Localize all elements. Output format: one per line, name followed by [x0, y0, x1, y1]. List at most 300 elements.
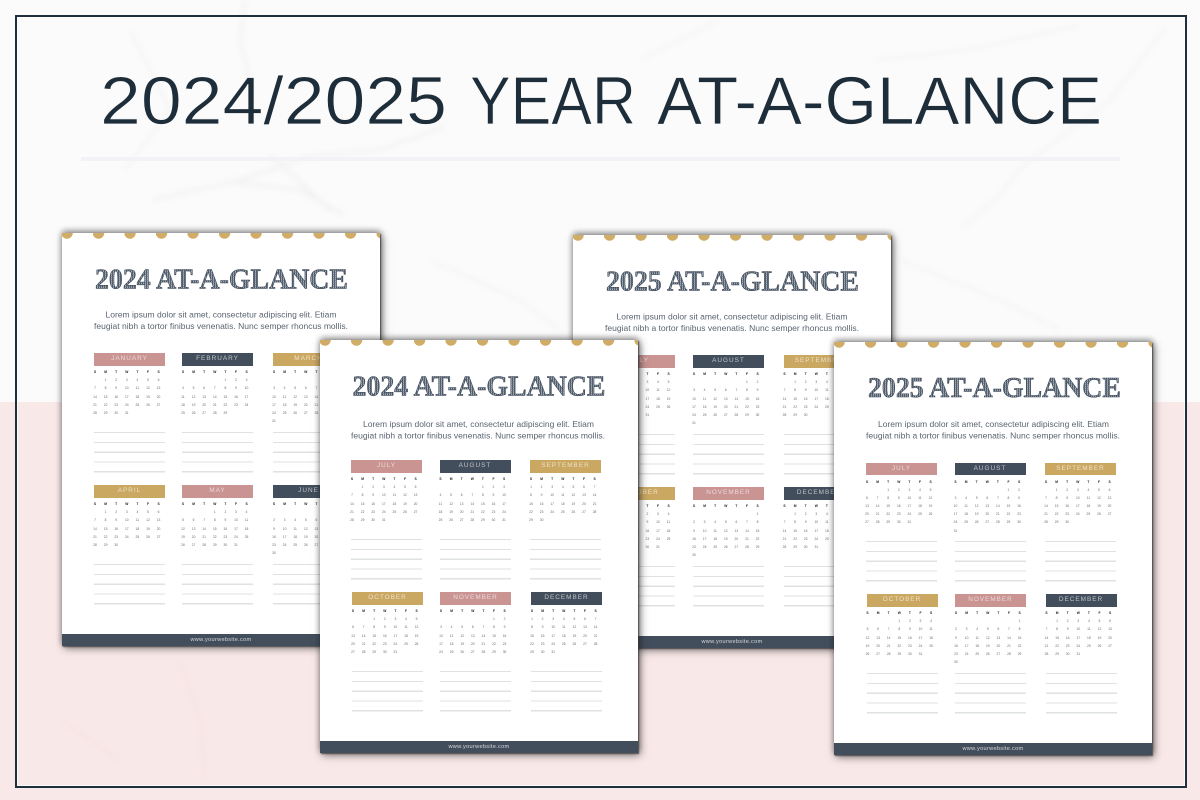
month: September: 10 [550, 493, 554, 497]
month: February: 20 [202, 403, 206, 407]
month: December: T [1067, 611, 1069, 615]
month: June: 29 [336, 543, 339, 547]
month: December: T [1088, 611, 1090, 615]
month: October: 14 [624, 529, 628, 533]
month: September: T [826, 372, 828, 376]
month: May: T [224, 502, 226, 506]
month: December: 15 [1055, 636, 1059, 640]
month: September: 13 [846, 388, 850, 392]
month: July [865, 463, 937, 582]
month: April: 1 [105, 510, 107, 514]
month: August: 25 [964, 520, 968, 524]
month: October: 10 [656, 520, 660, 524]
month: August: T [461, 477, 463, 481]
month: September [529, 460, 601, 580]
month: December: 1 [794, 512, 796, 516]
month: January: 8 [105, 386, 107, 390]
month: July: 25 [656, 405, 660, 409]
month: February: 27 [202, 411, 206, 415]
month: January: 10 [125, 386, 129, 390]
month: September: 6 [583, 485, 585, 489]
month: July: M [876, 480, 879, 484]
month: August: 11 [703, 397, 706, 401]
month: August: 20 [724, 405, 728, 409]
month: September: 12 [1097, 496, 1101, 500]
month: October: 29 [897, 652, 901, 656]
month: July: S [866, 480, 868, 484]
month: September: 21 [593, 502, 596, 506]
month: November: NOVEMBER [706, 489, 751, 496]
month: September: 12 [572, 493, 575, 497]
month: July: 21 [350, 510, 354, 514]
month: September: 11 [825, 388, 829, 392]
month: November: 28 [1007, 652, 1011, 656]
month: March: 27 [304, 411, 308, 415]
month: September: 22 [529, 510, 533, 514]
month: May: 21 [202, 535, 206, 539]
month: September: 20 [582, 502, 586, 506]
month: October: 31 [919, 652, 922, 656]
month: October: 25 [404, 642, 408, 646]
month: March: S [273, 370, 275, 374]
month: November: 30 [503, 650, 506, 654]
month: April: T [136, 502, 138, 506]
month: March: 20 [304, 403, 308, 407]
month: October: 8 [373, 625, 375, 629]
month: September: 27 [582, 510, 586, 514]
month: November: 22 [1018, 644, 1021, 648]
month: May: 13 [192, 527, 195, 531]
month: December: W [562, 609, 565, 613]
scalloped top edge [62, 233, 380, 239]
month: November: 11 [975, 636, 979, 640]
month: July: 15 [886, 504, 890, 508]
month: December: 19 [573, 634, 576, 638]
month: September: 19 [836, 397, 839, 401]
month: November: 4 [714, 520, 716, 524]
month: July: 20 [865, 512, 869, 516]
month: September: 20 [1108, 504, 1111, 508]
month: December [530, 592, 602, 712]
month: July: 28 [876, 520, 879, 524]
month: October: 23 [908, 644, 912, 648]
month: October: 12 [415, 625, 418, 629]
month: April: 26 [146, 535, 150, 539]
month: November: 17 [703, 537, 706, 541]
month: July: 8 [625, 388, 627, 392]
month: December: S [847, 504, 849, 508]
month: November: 20 [735, 537, 738, 541]
scalloped top edge [834, 342, 1152, 348]
month: July: T [372, 477, 374, 481]
month: August: 19 [713, 405, 717, 409]
month: July: T [908, 480, 910, 484]
month: August: 15 [745, 397, 749, 401]
month: April: 5 [147, 510, 149, 514]
month: May: 31 [234, 543, 238, 547]
month: November: 8 [493, 625, 495, 629]
month: September: W [815, 372, 818, 376]
month: June: 22 [336, 535, 339, 539]
month: August: 5 [976, 496, 978, 500]
month: October: 9 [909, 627, 911, 631]
month: September: S [530, 477, 532, 481]
month: August: 19 [975, 512, 979, 516]
month: May: T [203, 502, 205, 506]
month: January: 30 [114, 411, 118, 415]
month: December: 7 [784, 520, 785, 524]
month: December: 4 [1088, 619, 1090, 623]
month: July: 16 [635, 397, 639, 401]
month: September: 3 [551, 485, 553, 489]
month: December: 6 [847, 512, 849, 516]
month: November: T [461, 609, 463, 613]
month: April: APRIL [118, 487, 141, 494]
month: December: 10 [551, 625, 555, 629]
month: July: 27 [603, 413, 607, 417]
month: October: 30 [646, 545, 649, 549]
month: September: 24 [1076, 512, 1080, 516]
month: December: 11 [825, 520, 829, 524]
month: December: 20 [583, 634, 587, 638]
month: September: 30 [1065, 520, 1069, 524]
month: April: S [94, 502, 96, 506]
month: November: 20 [997, 644, 1000, 648]
month: April: 28 [93, 543, 97, 547]
month: November: 15 [756, 529, 759, 533]
page heading and intro: 2024 AT-A-GLANCE [95, 264, 348, 296]
month: October: 14 [362, 634, 365, 638]
month: March: T [315, 370, 317, 374]
month: September: 13 [582, 493, 586, 497]
month: September: 29 [793, 413, 797, 417]
month: May: 5 [182, 518, 184, 522]
month: October [866, 594, 938, 714]
month: November [439, 592, 511, 712]
month: September: 29 [529, 518, 533, 522]
month: March: 29 [325, 411, 329, 415]
month: July: 26 [929, 512, 932, 516]
month: October: 25 [667, 537, 670, 541]
month: October: S [604, 504, 606, 508]
month: October: 10 [919, 627, 922, 631]
month: August: 31 [502, 518, 506, 522]
main title: YEAR [470, 63, 636, 139]
month: September: 1 [794, 380, 796, 384]
month: February: 23 [234, 403, 238, 407]
month: January: 5 [147, 378, 149, 382]
month: October: 12 [866, 636, 869, 640]
month: August: M [965, 480, 967, 484]
month: March: 31 [272, 419, 276, 423]
month: September: 28 [783, 413, 786, 417]
month: November: 15 [1018, 636, 1021, 640]
month: July: 1 [625, 380, 627, 384]
month: October: 31 [656, 545, 660, 549]
month: September: S [1108, 480, 1111, 484]
month: August: M [703, 372, 706, 376]
month: August: 28 [735, 413, 738, 417]
month: July: 2 [372, 485, 374, 489]
month: October: 19 [415, 634, 418, 638]
month: December: S [783, 504, 786, 508]
month: December: 29 [1055, 652, 1059, 656]
month: December: 27 [846, 537, 850, 541]
month: September: 5 [837, 380, 838, 384]
month: October: 11 [404, 625, 408, 629]
month: October: 17 [656, 529, 660, 533]
month: March: 22 [325, 403, 329, 407]
month: October: 1 [636, 512, 638, 516]
month: January: 18 [136, 395, 139, 399]
month: November: NOVEMBER [453, 594, 498, 601]
month: February: S [245, 370, 248, 374]
month: April: W [125, 502, 128, 506]
month: November: 20 [471, 642, 475, 646]
month: August: W [724, 372, 727, 376]
month: November: 3 [966, 627, 968, 631]
month: May: 24 [234, 535, 238, 539]
month: April: 21 [93, 535, 97, 539]
month: February: 16 [234, 395, 238, 399]
month: November: 27 [997, 652, 1000, 656]
month: June: JUNE [298, 487, 319, 494]
month: April: 11 [136, 518, 139, 522]
month: February: 10 [245, 386, 248, 390]
month: December: 13 [846, 520, 850, 524]
page heading and intro: Lorem ipsum dolor sit amet, consectetur adipiscing elit. Etiam [616, 312, 848, 322]
month: May: 29 [213, 543, 217, 547]
month: January: T [136, 370, 138, 374]
month: September: 19 [1097, 504, 1101, 508]
month: February: 7 [214, 386, 216, 390]
month: September [1044, 463, 1116, 582]
month: June: 6 [315, 518, 317, 522]
month: June: 17 [283, 535, 286, 539]
month: October: OCTOBER [620, 489, 659, 496]
month: August: 15 [481, 502, 485, 506]
month: November: 9 [955, 636, 957, 640]
month: December: 18 [825, 529, 829, 533]
month: September: 8 [530, 493, 532, 497]
footer bar: www.yourwebsite.com [701, 639, 763, 645]
month: August: 26 [713, 413, 717, 417]
month: January: 22 [104, 403, 107, 407]
month: June: 3 [284, 518, 286, 522]
month: October: 12 [603, 529, 607, 533]
month: November: 18 [450, 642, 453, 646]
month: March: 17 [272, 403, 276, 407]
month: November: 12 [724, 529, 728, 533]
month: April: 8 [105, 518, 107, 522]
month: April: 27 [157, 535, 160, 539]
month: December: 12 [1098, 627, 1101, 631]
month: October: 3 [394, 617, 396, 621]
footer bar [834, 743, 1152, 755]
month: September: 21 [1044, 512, 1048, 516]
month: July: 17 [646, 397, 649, 401]
month: July: 2 [898, 488, 900, 492]
month: January: 13 [157, 386, 160, 390]
month: December: 4 [826, 512, 828, 516]
month: November: 26 [724, 545, 728, 549]
month: October: 28 [887, 652, 891, 656]
month: December: 30 [541, 650, 544, 654]
month: November: 11 [450, 634, 453, 638]
month: January: JANUARY [111, 355, 148, 362]
main title: AT-A-GLANCE [657, 63, 1102, 139]
month: October: 26 [603, 545, 607, 549]
month: December: 18 [562, 634, 566, 638]
month: July: 19 [403, 502, 407, 506]
month: October: M [614, 504, 617, 508]
month: September: 2 [805, 380, 807, 384]
month: November: 30 [954, 660, 958, 664]
month: October: 7 [625, 520, 627, 524]
month: December: S [594, 609, 597, 613]
month: September: 14 [1044, 504, 1048, 508]
month: November: 16 [692, 537, 696, 541]
month: July: S [667, 372, 670, 376]
month: May: 30 [224, 543, 227, 547]
month: December: DECEMBER [797, 489, 841, 496]
month: October: 13 [876, 636, 880, 640]
month: July: 1 [362, 485, 364, 489]
month: July: 30 [897, 520, 901, 524]
month: May: 19 [181, 535, 185, 539]
month: November: W [986, 611, 989, 615]
month: July: 29 [624, 413, 628, 417]
month: November: 30 [692, 553, 696, 557]
month: July: 5 [668, 380, 669, 384]
month: September: 27 [1108, 512, 1111, 516]
month: August: S [503, 477, 505, 481]
month: August: W [471, 477, 474, 481]
month: September: 2 [541, 485, 543, 489]
month: June: T [315, 502, 317, 506]
month: October: M [362, 609, 365, 613]
month: October: 6 [877, 627, 879, 631]
month: October: 17 [919, 636, 922, 640]
month: May: 12 [181, 527, 185, 531]
month: November: 13 [471, 634, 475, 638]
month: October: 9 [384, 625, 386, 629]
month: February: 4 [182, 386, 184, 390]
month: November: 14 [1007, 636, 1011, 640]
month: July: 14 [350, 502, 354, 506]
month: October: M [877, 611, 879, 615]
month: August: AUGUST [459, 462, 491, 469]
month: November: 17 [965, 644, 968, 648]
month: September: 9 [541, 493, 543, 497]
month: March: 23 [336, 403, 339, 407]
month: August: 24 [502, 510, 506, 514]
month: May: 1 [214, 510, 216, 514]
month: May: 2 [224, 510, 226, 514]
month: September: 12 [836, 388, 839, 392]
month: November: 6 [472, 625, 474, 629]
panel: 2024 calendar front page, July to December [320, 340, 638, 753]
month: November: 19 [986, 644, 990, 648]
scalloped top edge [320, 340, 638, 346]
month: July: 23 [897, 512, 901, 516]
month: December: 24 [814, 537, 818, 541]
month: October: 28 [362, 650, 365, 654]
month: June: 21 [325, 535, 329, 539]
month: July: 24 [646, 405, 649, 409]
month: March: 28 [315, 411, 318, 415]
month: June: S [336, 502, 339, 506]
month: May: 6 [193, 518, 195, 522]
month: November: T [976, 611, 978, 615]
month: September: 10 [1076, 496, 1080, 500]
month: November: M [450, 609, 453, 613]
month: July: 4 [919, 488, 921, 492]
month: December: 4 [563, 617, 565, 621]
month: October: 21 [362, 642, 365, 646]
month: October: 9 [646, 520, 648, 524]
month: September: 11 [1087, 496, 1090, 500]
month: February: 29 [224, 411, 227, 415]
month: May: S [245, 502, 248, 506]
month: August: 18 [439, 510, 442, 514]
month: May: 18 [245, 527, 248, 531]
month: June: 9 [273, 527, 275, 531]
month: September: 25 [1087, 512, 1090, 516]
month: February: 12 [192, 395, 195, 399]
month: April: 14 [93, 527, 97, 531]
month: November: 7 [1008, 627, 1010, 631]
month: December [1044, 594, 1117, 714]
month: February: W [213, 370, 216, 374]
month: April: 9 [115, 518, 117, 522]
month: November: 25 [975, 652, 979, 656]
month: October: S [415, 609, 418, 613]
month: December: 30 [804, 545, 808, 549]
month: November: 5 [461, 625, 463, 629]
month: July: 5 [404, 485, 406, 489]
month: September: 25 [825, 405, 829, 409]
month: September: 19 [572, 502, 575, 506]
month: August: T [482, 477, 484, 481]
month: August: 10 [502, 493, 506, 497]
month: May: F [235, 502, 237, 506]
month: December: 26 [573, 642, 576, 646]
month: December: 2 [1067, 619, 1069, 623]
month: August: 22 [1007, 512, 1010, 516]
page heading and intro [94, 264, 348, 331]
month: December: 30 [1066, 652, 1070, 656]
month: September: 3 [1077, 488, 1079, 492]
month: August: 7 [735, 388, 737, 392]
month: June: 16 [272, 535, 276, 539]
month: December: 24 [1076, 644, 1080, 648]
month: November: 25 [713, 545, 717, 549]
month: December: 29 [530, 650, 534, 654]
month: August: 28 [470, 518, 474, 522]
month: June: 23 [272, 543, 276, 547]
month: December: 31 [1076, 652, 1080, 656]
month: July: 22 [361, 510, 364, 514]
month: November: 13 [735, 529, 738, 533]
month: March: 15 [325, 395, 329, 399]
month: March: 16 [336, 395, 339, 399]
month: March: 9 [337, 386, 338, 390]
month: May: 4 [246, 510, 247, 514]
month: June: 24 [283, 543, 286, 547]
month: October: S [667, 504, 670, 508]
month: March: 24 [272, 411, 276, 415]
